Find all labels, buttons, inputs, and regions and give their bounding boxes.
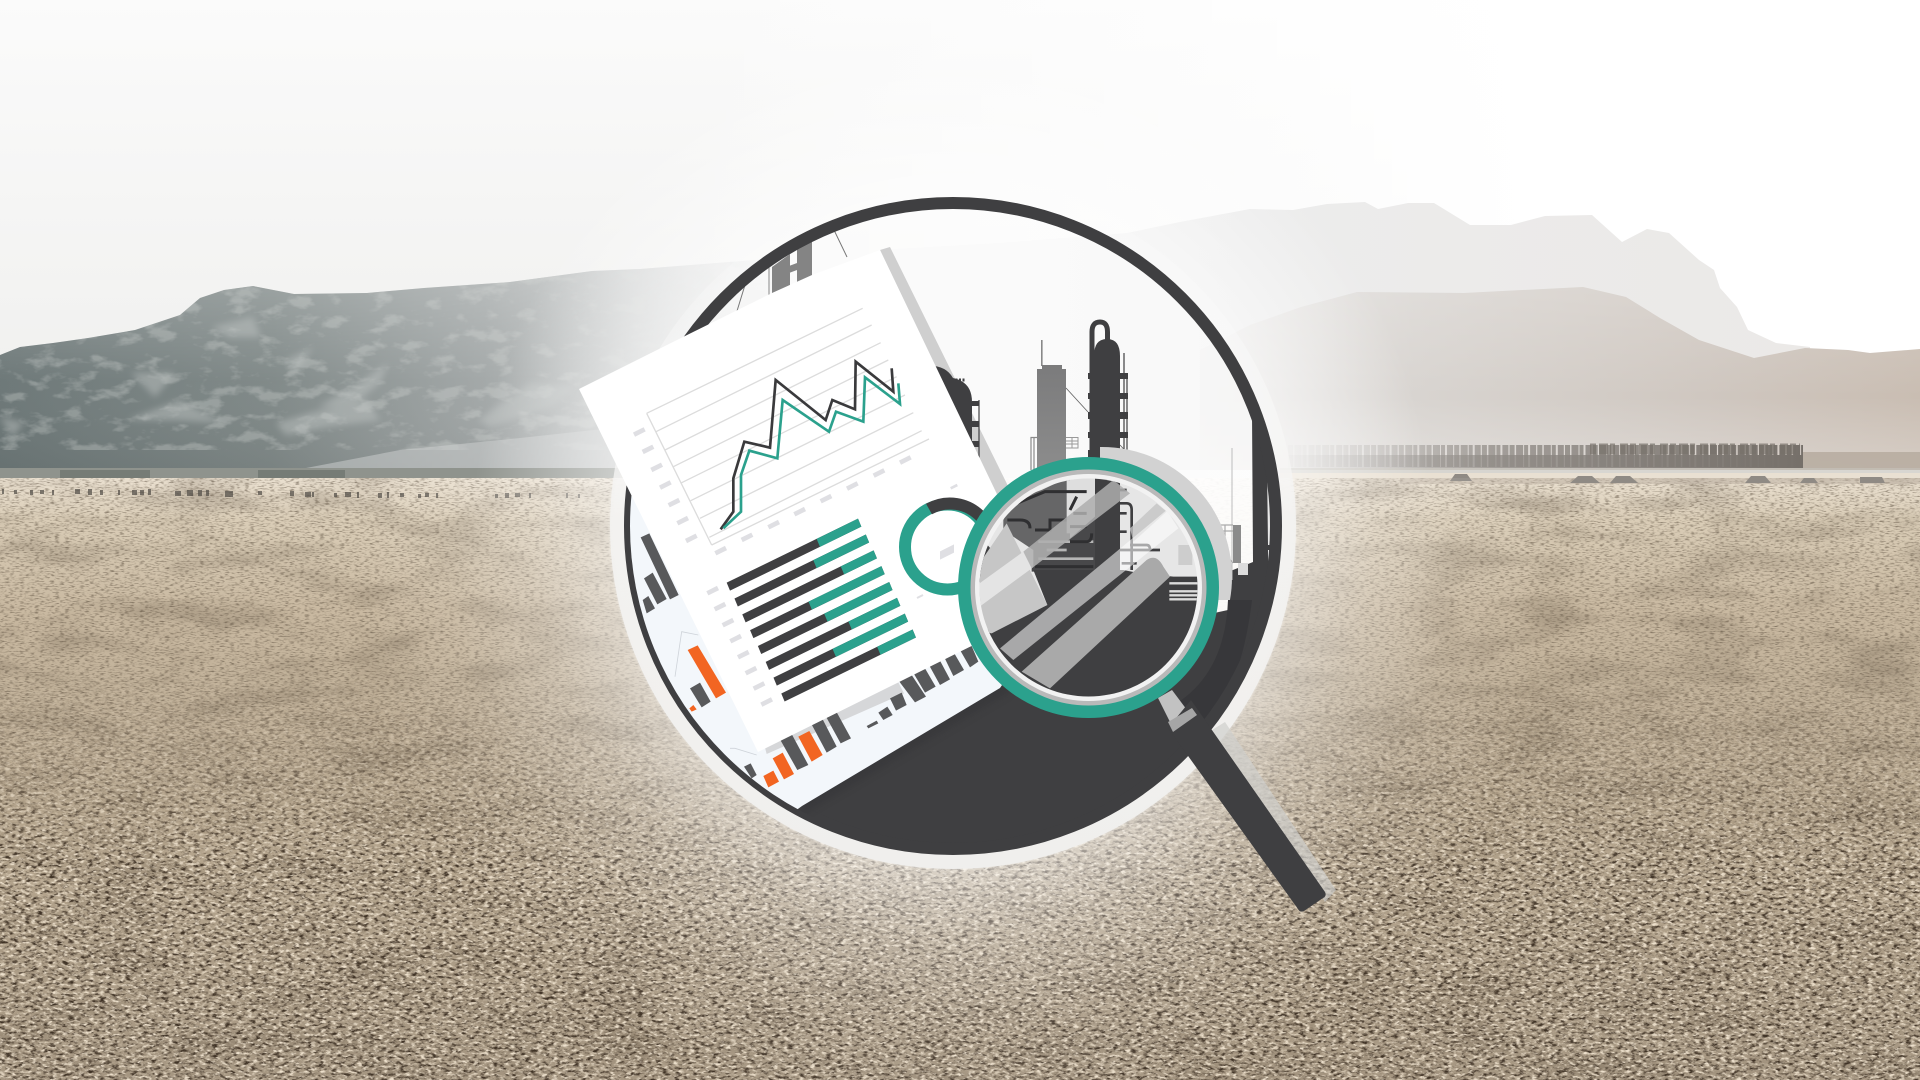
magnifying glass xyxy=(964,464,1336,912)
background: left tree line xyxy=(0,468,640,478)
page: grey edge strip xyxy=(880,247,1064,607)
lens cast shadow xyxy=(1100,447,1232,600)
lens: pale backdrop xyxy=(988,484,1197,600)
lens: lattice stripes xyxy=(1169,583,1200,599)
page: bar chart labels xyxy=(707,588,772,705)
line chart: dark series xyxy=(721,362,893,529)
magnifier: handle xyxy=(1168,700,1326,912)
lens: column xyxy=(1095,477,1120,577)
lens: grey vessel block xyxy=(1003,477,1070,570)
page: stacked horizontal bar chart xyxy=(727,515,916,705)
background: near right ridge xyxy=(1200,287,1920,470)
line chart: teal series xyxy=(723,377,900,528)
refinery: silhouette inside circle xyxy=(736,232,1270,843)
magnifier: neck xyxy=(1158,690,1187,722)
dark ring of the circle xyxy=(630,203,1276,849)
lens: dark ground xyxy=(970,570,1210,710)
lens: donut fragment xyxy=(977,537,995,583)
magnifier: ferrule xyxy=(1168,708,1197,732)
lens: dark lower plant xyxy=(1032,517,1095,572)
lens: page highlight band xyxy=(975,552,1032,610)
background: dry grass field xyxy=(0,478,1920,1080)
top report page xyxy=(579,250,1050,752)
under page: left column bars xyxy=(641,533,757,778)
lens: page corner xyxy=(975,523,1047,633)
background: grazing herd on the left xyxy=(2,489,580,498)
main illustration xyxy=(520,203,1336,912)
background: right tree line xyxy=(1288,449,1920,468)
magnifier: handle shadow xyxy=(1212,722,1336,902)
refinery: distillation column with pipe and platforms xyxy=(1088,320,1128,458)
lens: pale tower xyxy=(1067,477,1095,533)
refinery: right lattice and antenna xyxy=(1221,448,1248,580)
magnifier: rim xyxy=(964,464,1212,712)
refinery: ground shade below lens xyxy=(1198,600,1248,686)
refinery: top-left tower fragment xyxy=(737,230,847,311)
under page: sheet xyxy=(630,496,1002,810)
under page: bottom row bars xyxy=(763,646,978,787)
white glow over the field xyxy=(300,478,1620,1080)
white glow over the mountains xyxy=(400,0,1500,478)
background: sky xyxy=(0,0,1920,490)
halo ring around the circle xyxy=(617,190,1289,862)
refinery: left vessel xyxy=(936,366,980,458)
lens: right pipes and platforms xyxy=(1120,490,1160,570)
lens: reflection band, upper xyxy=(1023,480,1130,568)
background: far right mountain xyxy=(880,202,1810,470)
page: donut chart xyxy=(905,503,992,598)
page: sheet xyxy=(579,250,1050,752)
lens: pale walkway stripes xyxy=(1038,542,1093,559)
refinery: dark ground and right stack xyxy=(803,421,1270,843)
refinery: slit in right stack xyxy=(1267,482,1270,561)
circle interior below horizon xyxy=(630,478,1276,849)
circle interior above horizon xyxy=(634,203,1272,478)
background: left mountain xyxy=(0,262,732,468)
page: line chart xyxy=(634,308,957,553)
line chart: axis labels xyxy=(634,429,957,553)
line chart: grid xyxy=(647,308,929,545)
lens: reflection band, wide xyxy=(1022,558,1170,688)
lens: far block xyxy=(1178,545,1192,565)
refinery: grey tower xyxy=(1030,340,1124,470)
magnifier: magnified view xyxy=(980,478,1198,696)
lens: reflection band, small xyxy=(1130,503,1167,542)
background: horizon strips and tents on the right xyxy=(1280,468,1920,484)
under page: shadow xyxy=(802,660,1010,814)
lens: pipes and walkways xyxy=(1007,492,1093,567)
lens: reflection band, thin xyxy=(1000,510,1178,660)
under page with small bar charts xyxy=(630,496,1002,810)
